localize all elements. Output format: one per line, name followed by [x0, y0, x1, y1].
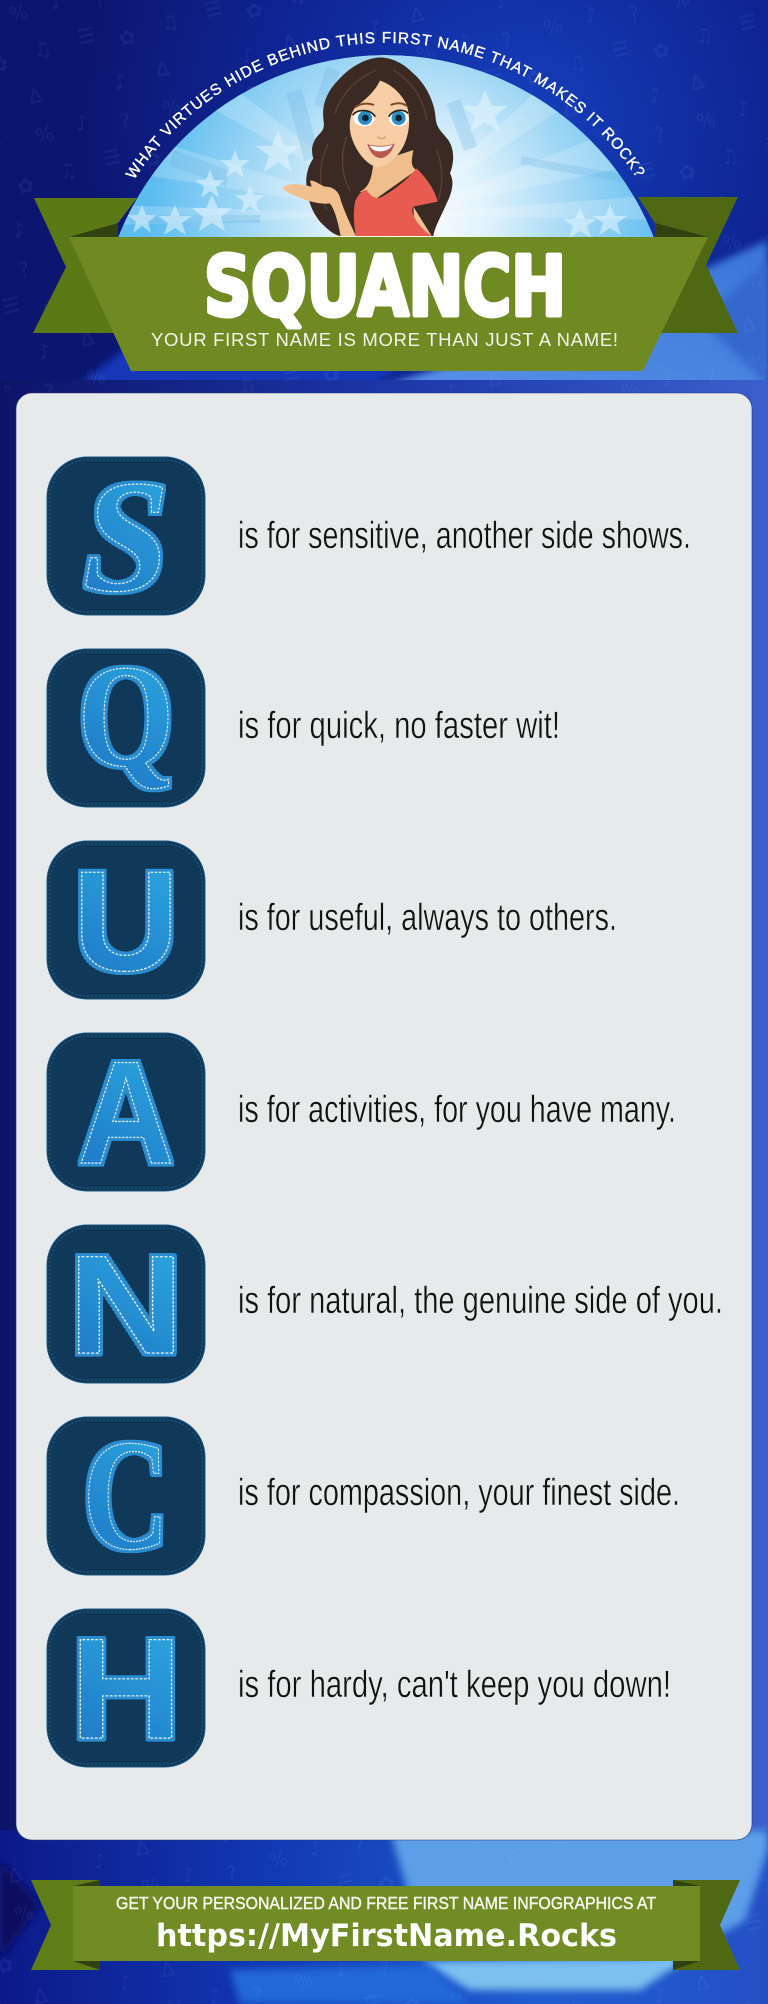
footer left tail [31, 1880, 100, 1970]
main panel [16, 393, 752, 1840]
hair [306, 57, 453, 236]
row N [47, 1225, 723, 1383]
curved heading: WHAT VIRTUES HIDE BEHIND THIS FIRST NAME THAT MAKES IT ROCK? [124, 32, 645, 178]
letter A: A [78, 1031, 174, 1194]
row H [47, 1609, 671, 1769]
row U [47, 841, 617, 1001]
ribbon right tail [630, 197, 738, 333]
left arm and hand [283, 181, 356, 236]
ribbon fold right [655, 223, 708, 237]
tile H [47, 1609, 205, 1767]
character illustration [283, 57, 453, 236]
line U: is for useful, always to others. [238, 897, 617, 939]
tagline: YOUR FIRST NAME IS MORE THAN JUST A NAME! [151, 329, 618, 350]
footer fold shadows [73, 1880, 700, 1970]
line Q: is for quick, no faster wit! [238, 705, 560, 747]
row Q [47, 635, 560, 807]
footer main band [73, 1886, 700, 1961]
row C [47, 1408, 680, 1583]
top ribbon [33, 197, 738, 371]
shirt [354, 168, 438, 236]
letter S: S [83, 447, 169, 625]
footer right tail [673, 1880, 740, 1970]
row S [47, 447, 691, 625]
name title: SQUANCH [204, 240, 566, 335]
ribbon main [69, 237, 708, 371]
tile A [47, 1033, 205, 1191]
letter H: H [70, 1610, 182, 1769]
mouth [367, 137, 395, 158]
footer ribbon [31, 1880, 740, 1970]
eyes [353, 103, 409, 126]
right arm [413, 207, 432, 236]
ribbon left tail [33, 198, 137, 333]
letter N: N [68, 1226, 184, 1383]
letter C: C [83, 1408, 169, 1583]
footer call to action: GET YOUR PERSONALIZED AND FREE FIRST NAME INFOGRAPHICS AT [116, 1893, 656, 1913]
header: starry dome with character [118, 55, 654, 237]
letter U: U [73, 842, 179, 1001]
row A [47, 1031, 676, 1194]
dome backdrop [118, 55, 654, 237]
footer url: https://MyFirstName.Rocks [156, 1918, 617, 1954]
tile Q [47, 649, 205, 807]
face [350, 81, 409, 167]
ribbon fold left [69, 223, 118, 237]
tile N [47, 1225, 205, 1383]
tile C [47, 1417, 205, 1575]
tile U [47, 841, 205, 999]
tile S [47, 457, 205, 615]
neck and chest [360, 150, 417, 198]
hair highlights [320, 70, 442, 210]
letter Q: Q [78, 635, 174, 797]
